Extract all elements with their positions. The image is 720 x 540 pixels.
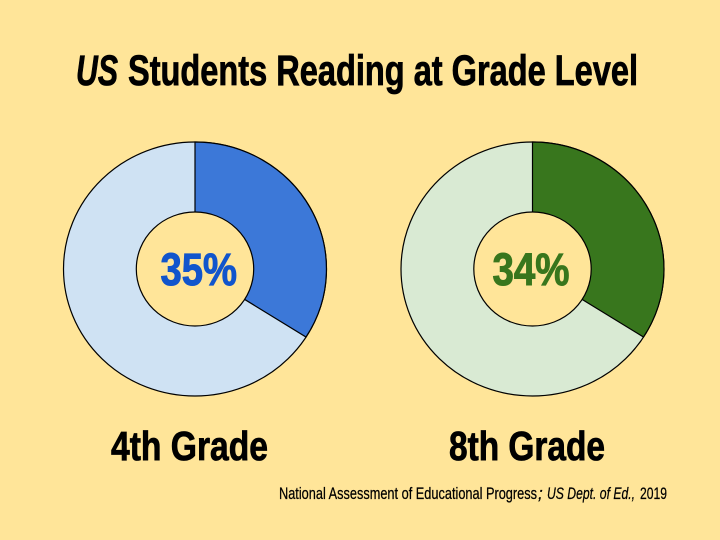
value: 35%: 35% bbox=[160, 244, 237, 295]
donut chart: 4th grade bbox=[64, 142, 326, 396]
label: 8th Grade: 8th Grade bbox=[449, 423, 605, 469]
title: US bbox=[76, 47, 118, 95]
source citation: US Dept. of Ed., bbox=[547, 484, 635, 503]
value: 34%: 34% bbox=[492, 244, 570, 295]
donut chart: 8th grade bbox=[401, 142, 664, 396]
source citation: ; bbox=[538, 484, 543, 503]
source citation: National Assessment of Educational Progress bbox=[279, 484, 537, 503]
label: 4th Grade: 4th Grade bbox=[111, 423, 268, 469]
source citation: 2019 bbox=[640, 484, 667, 503]
